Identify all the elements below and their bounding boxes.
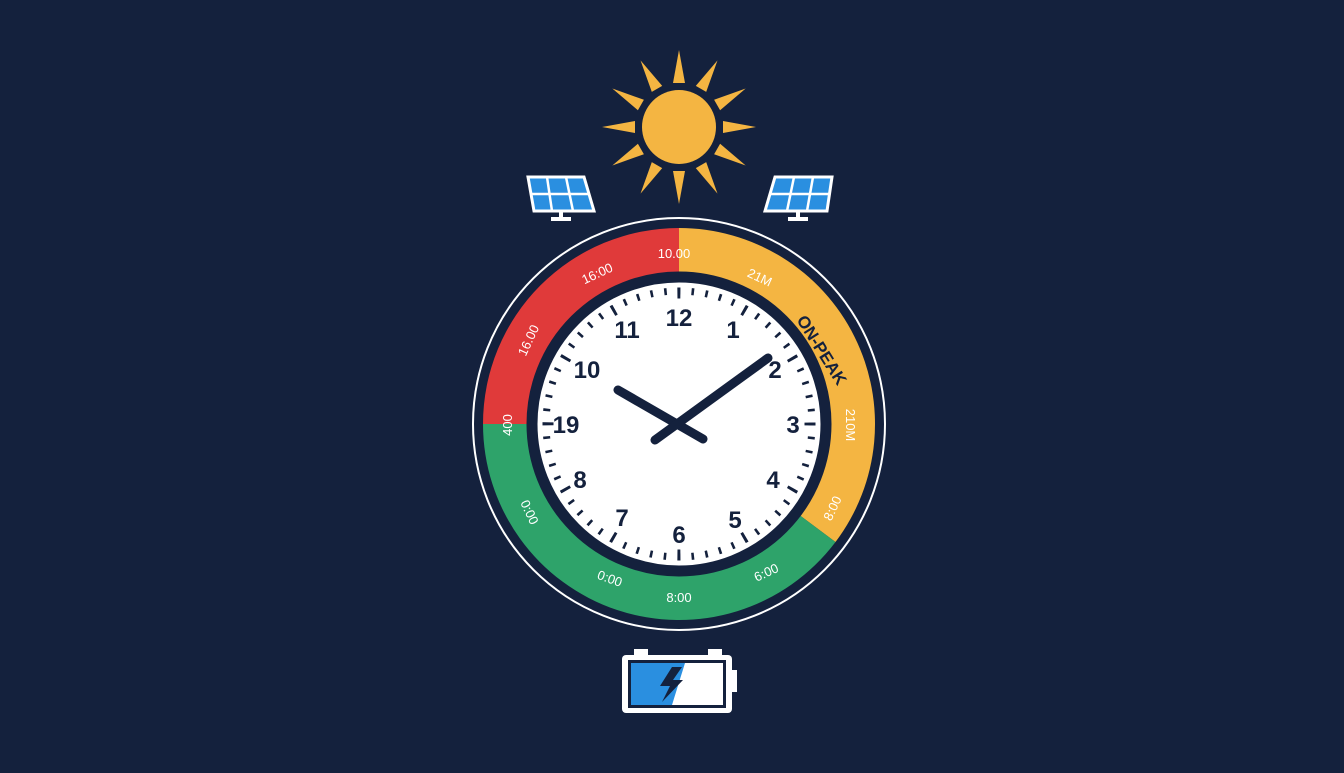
clock numbers: 3 — [786, 412, 800, 439]
clock numbers: 4 — [766, 467, 780, 494]
clock numbers: 1 — [726, 317, 740, 344]
ring labels: 210M — [843, 409, 858, 441]
clock numbers: 10 — [574, 357, 600, 384]
clock numbers: 7 — [615, 505, 629, 532]
ring segment: yellow on-peak — [679, 228, 875, 542]
ring segment: red — [483, 228, 679, 424]
clock numbers: 5 — [728, 507, 742, 534]
icon: solar panel right — [765, 177, 832, 221]
ring labels: 16.00 — [515, 322, 542, 358]
ring labels: 21M — [745, 265, 774, 290]
ring labels: 400 — [500, 414, 515, 436]
clock — [473, 218, 885, 630]
ring labels: 16:00 — [579, 260, 615, 287]
clock numbers: 2 — [768, 357, 782, 384]
ring labels: 10.00 — [658, 246, 690, 261]
label: on-peak: ON-PEAK — [793, 312, 851, 389]
clock numbers: 19 — [553, 412, 579, 439]
ring labels — [500, 246, 858, 605]
ring labels: 8:00 — [666, 590, 692, 605]
icon: battery — [622, 649, 737, 713]
ring labels: 0:00 — [517, 498, 542, 527]
ring labels: 8:00 — [820, 494, 845, 523]
clock numbers: 12 — [666, 305, 692, 332]
ring labels: 6:00 — [752, 560, 781, 585]
clock numbers: 11 — [614, 317, 640, 344]
clock hands — [618, 358, 768, 440]
ring labels: 0:00 — [595, 567, 624, 590]
icon: solar panel left — [528, 177, 594, 221]
icon: sun — [602, 50, 756, 204]
clock face — [532, 277, 826, 571]
ring segment: green — [483, 424, 836, 620]
clock numbers — [553, 305, 800, 549]
clock numbers: 6 — [672, 522, 686, 549]
clock numbers: 8 — [573, 467, 587, 494]
